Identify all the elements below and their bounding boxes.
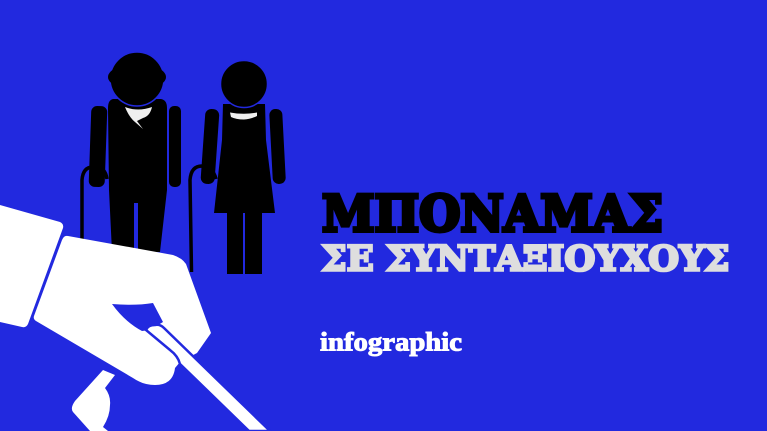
man's scarf [125,107,152,129]
cane handle [72,370,115,431]
icon: elderly man with cane [82,52,181,252]
label: infographic: infographic [320,328,462,356]
hand [34,236,211,385]
woman's necklace [230,112,257,120]
shirt cuff [0,205,63,327]
cane shaft [146,325,270,431]
illustration: white hand holding cane [0,205,270,431]
subtitle: ΣΕ ΣΥΝΤΑΞΙΟΥΧΟΥΣ [322,238,730,280]
gap between fingers [112,303,163,331]
icon: elderly woman with cane [190,60,286,274]
title: main heading: ΜΠΟΝΑΜΑΣ [322,184,663,243]
